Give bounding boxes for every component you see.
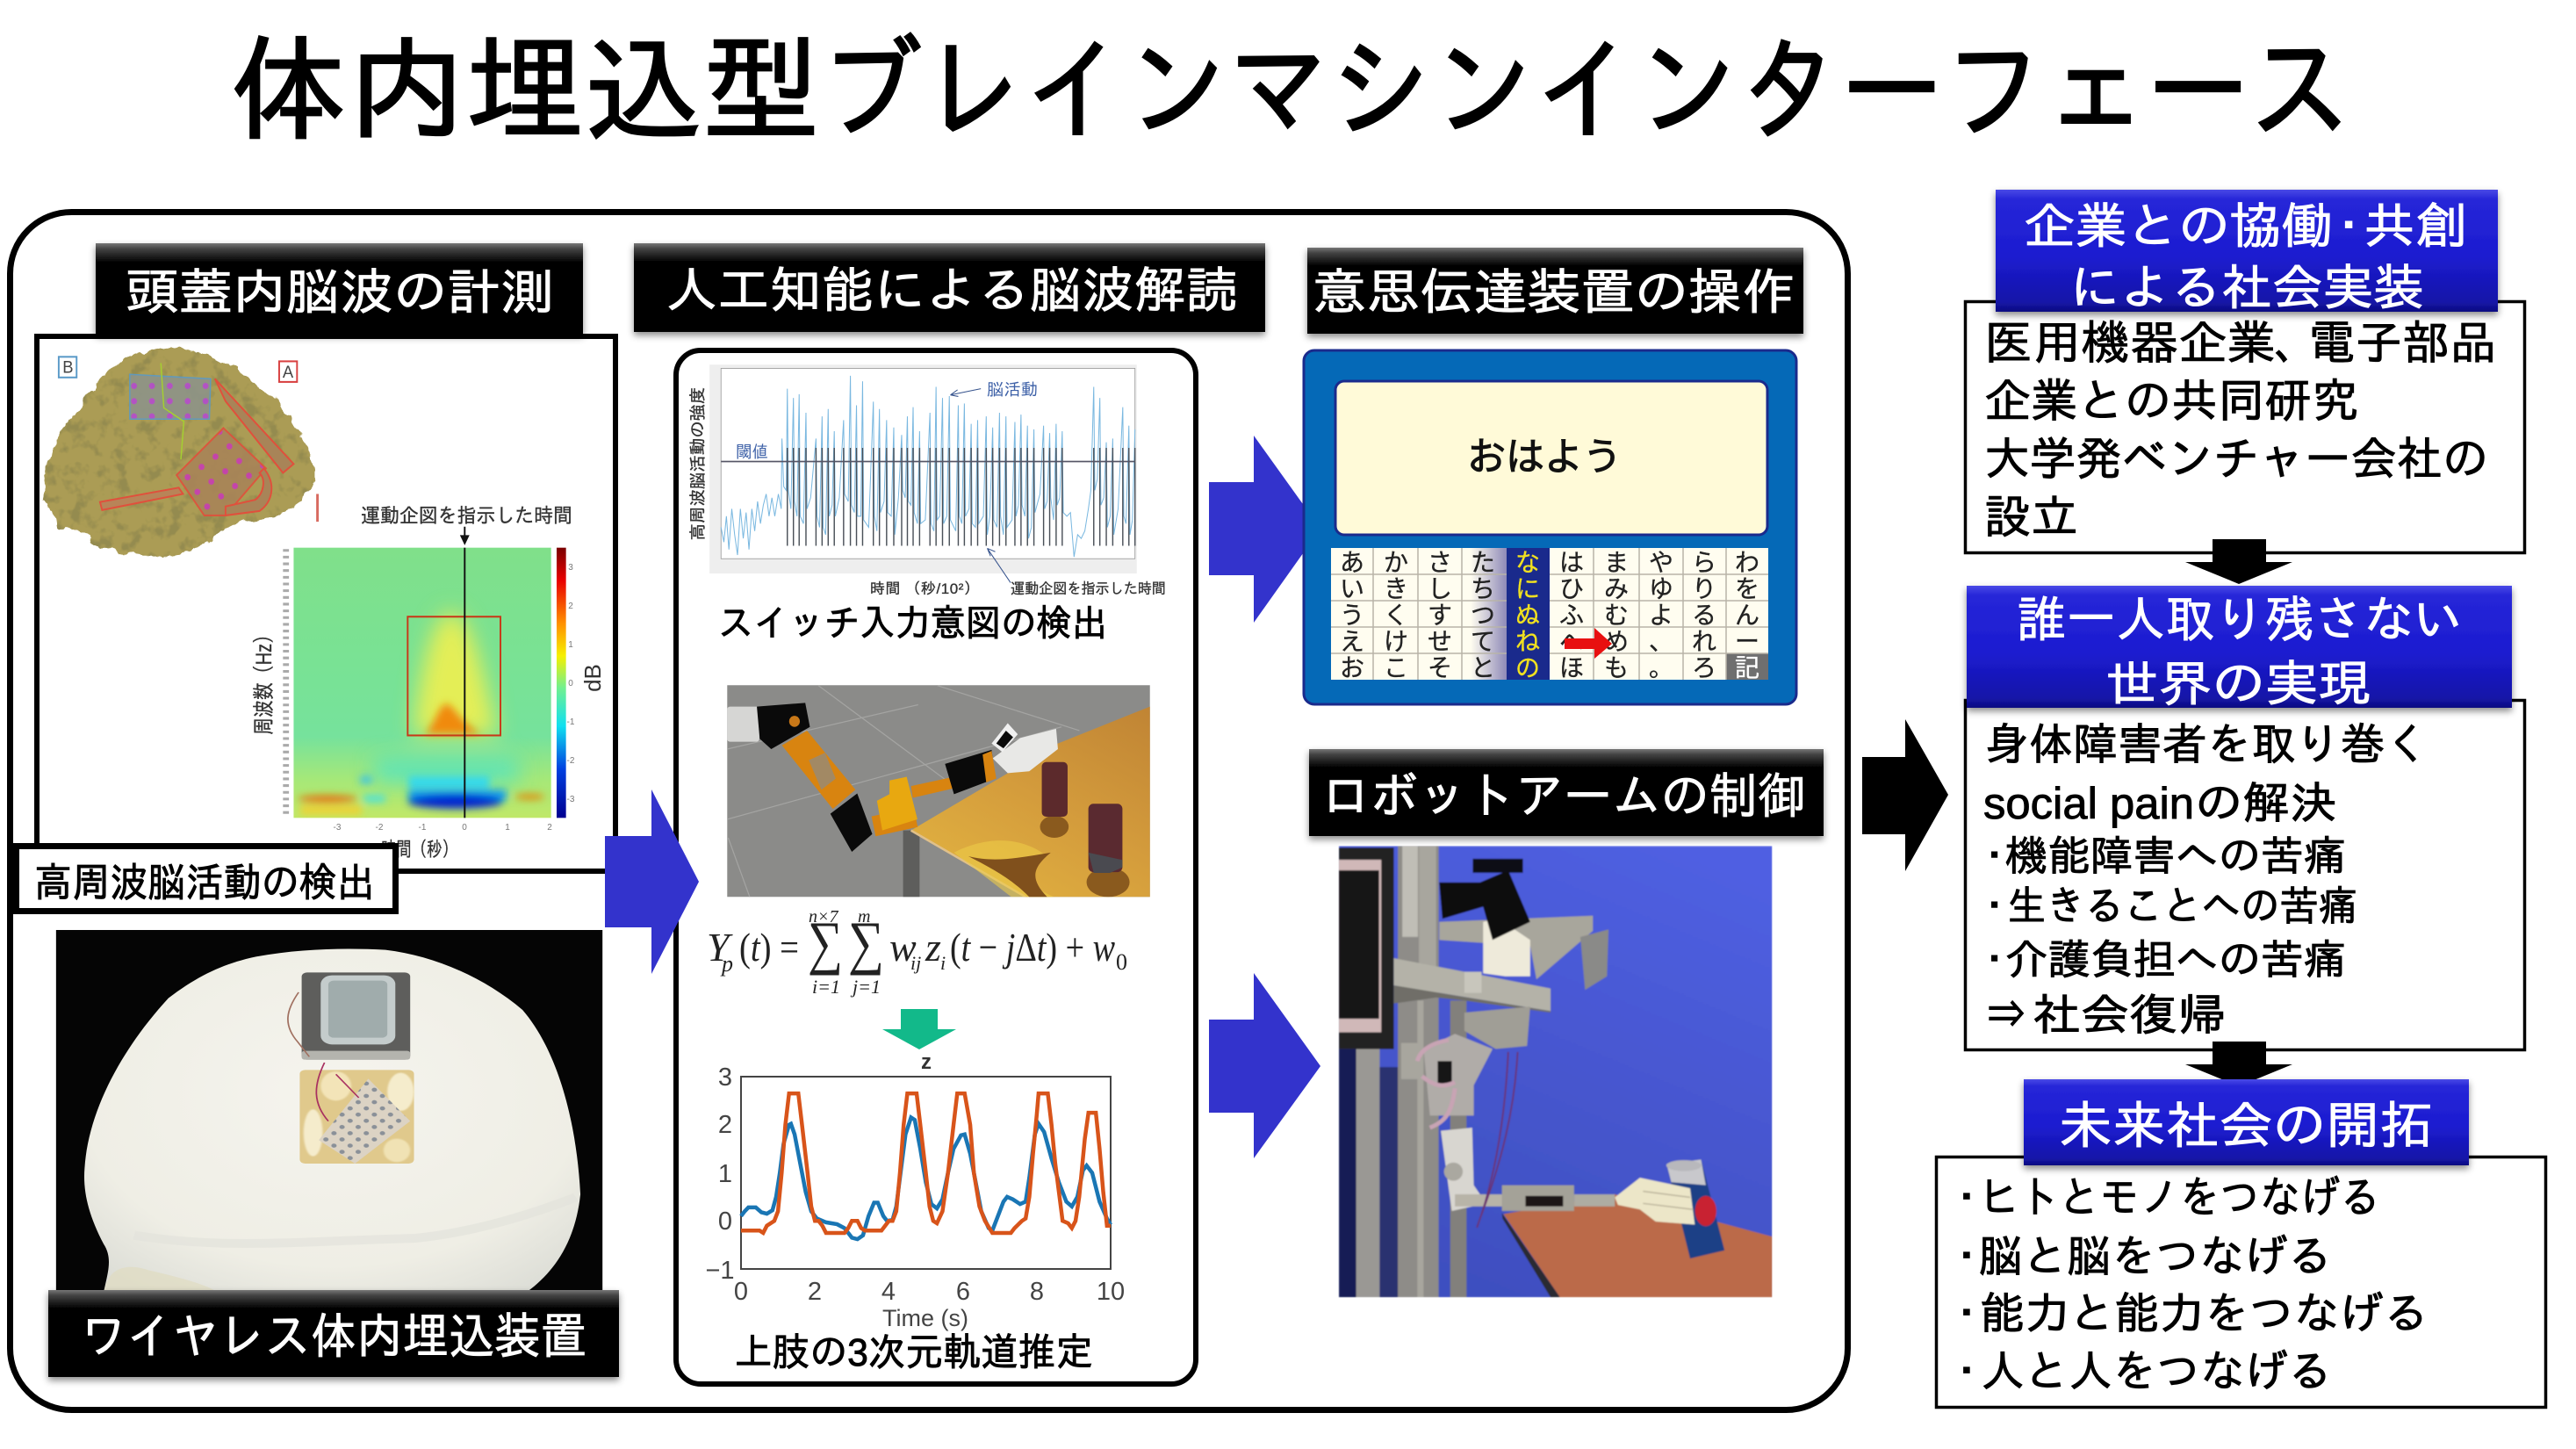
chart: 3D trajectory z axis: 2	[808, 1278, 822, 1306]
speller character grid: わ	[1735, 549, 1759, 576]
equation: trajectory decoder: j=1	[850, 976, 881, 998]
title: ブレインマシンインターフェース	[820, 26, 2351, 155]
speller character grid: く	[1384, 602, 1408, 629]
equation: trajectory decoder: Y	[707, 925, 733, 970]
heading: inclusive society: 世界の実現	[2105, 656, 2371, 711]
chart: 3D trajectory z axis: 0	[718, 1208, 732, 1236]
panel: future society body: 能力と能力をつなげる	[1980, 1289, 2428, 1338]
title	[230, 26, 2351, 155]
chart y label: 高周波脳活動の強度	[689, 386, 708, 541]
speller character grid: よ	[1649, 602, 1673, 629]
figure: brain with electrodes: B	[62, 358, 74, 378]
speller character grid: あ	[1340, 549, 1364, 576]
speller character grid: ん	[1735, 602, 1759, 629]
chart: 3D trajectory z axis: 2	[718, 1111, 732, 1139]
panel: future society body: ヒトとモノをつなげる	[1979, 1173, 2380, 1222]
caption: high-frequency activity detection	[16, 847, 395, 912]
speller character grid: め	[1604, 628, 1629, 655]
panel: future society body: ・	[1945, 1289, 1989, 1338]
panel: inclusive society body: の解決	[2195, 779, 2337, 828]
cue label: 運動企図を指示した時間	[1011, 580, 1166, 597]
equation: trajectory decoder: ij	[910, 952, 921, 974]
speller character grid: ー	[1735, 628, 1759, 655]
panel: industry collaboration body	[1965, 302, 2525, 553]
figure: brain with electrodes: A	[283, 363, 294, 382]
equation: trajectory decoder: z	[925, 925, 941, 970]
heading: industry collaboration	[1996, 190, 2498, 315]
heading: future society: 未来社会の開拓	[2059, 1098, 2433, 1155]
speller character grid: む	[1604, 602, 1629, 629]
heatmap tick labels: 2	[568, 602, 573, 611]
equation: trajectory decoder: n×7	[809, 907, 838, 926]
speller character grid: へ	[1559, 628, 1584, 655]
arrow: black right to outcomes	[1862, 719, 1948, 871]
chart: 3D trajectory z axis: 3	[718, 1063, 732, 1092]
heatmap tick labels: -1	[419, 823, 427, 833]
panel: future society body: 脳と脳をつなげる	[1979, 1232, 2332, 1281]
heading: intracranial EEG	[96, 243, 583, 334]
panel: industry collaboration body: 設立	[1984, 492, 2078, 544]
heatmap tick labels: 3	[568, 563, 573, 573]
panel: intracranial EEG measurement	[37, 336, 615, 871]
heatmap tick labels: 0	[568, 679, 573, 688]
speller character grid: ゆ	[1649, 575, 1673, 602]
speller character grid: て	[1471, 628, 1495, 655]
panel: future society body: 人と人をつなげる	[1981, 1347, 2332, 1396]
brain activity label: 脳活動	[987, 381, 1038, 400]
heatmap tick labels: -1	[567, 717, 575, 727]
chart: switch detection waveform	[709, 364, 1137, 583]
heading: AI decoding: 人工知能による脳波解読	[666, 263, 1238, 318]
panel: industry collaboration body: 企業との共同研究	[1984, 376, 2358, 428]
arrow: black down 1	[2185, 539, 2292, 584]
speller character grid: こ	[1384, 654, 1408, 681]
speller character grid: し	[1428, 575, 1452, 602]
speller character grid: せ	[1428, 628, 1452, 655]
panel: inclusive society body: ・	[1974, 833, 2015, 879]
speller character grid: ち	[1471, 575, 1495, 602]
figure: brain with electrodes	[44, 350, 319, 556]
panel: speller screen	[1304, 350, 1796, 704]
speller character grid: り	[1692, 575, 1716, 602]
speller character grid: 。	[1649, 654, 1673, 681]
speller character grid: い	[1340, 575, 1364, 602]
panel: inclusive society body: ・	[1974, 936, 2015, 983]
speller character grid: つ	[1471, 602, 1495, 629]
heatmap tick labels: 1	[568, 640, 573, 650]
speller character grid: お	[1340, 654, 1364, 681]
heatmap tick labels: 2	[547, 823, 552, 833]
speller character grid: ぬ	[1515, 602, 1540, 629]
equation: trajectory decoder: ∑	[848, 909, 884, 976]
speller character grid: ね	[1515, 628, 1540, 655]
speller character grid: 記	[1735, 654, 1759, 681]
panel: industry collaboration body: 医用機器企業	[1984, 318, 2276, 370]
panel: inclusive society body	[1965, 701, 2525, 1050]
speller character grid: は	[1559, 549, 1584, 576]
equation: trajectory decoder: p	[720, 951, 733, 977]
heading: wireless implant	[48, 1290, 619, 1377]
threshold label: 閾値	[736, 443, 768, 462]
speller character grid: け	[1384, 628, 1408, 655]
heading: communication device	[1307, 248, 1803, 334]
speller character grid: す	[1428, 602, 1452, 629]
speller character grid: う	[1340, 602, 1364, 629]
heading: inclusive society: 誰一人取り残さない	[2017, 592, 2463, 647]
heatmap tick labels: -2	[567, 756, 575, 766]
heading: communication device: 意思伝達装置の操作	[1313, 264, 1795, 320]
speller character grid: れ	[1692, 628, 1716, 655]
arrow: black down 2	[2185, 1042, 2292, 1086]
heatmap tick labels: 0	[462, 823, 467, 833]
equation: trajectory decoder: (t) =	[739, 925, 799, 970]
speller character grid: ま	[1604, 549, 1629, 576]
chart x label: 時間 （秒/10²）	[870, 580, 979, 597]
speller output display	[1335, 381, 1767, 535]
speller character grid	[1331, 548, 1768, 681]
speller character grid: る	[1692, 602, 1716, 629]
speller output display: おはよう	[1467, 436, 1622, 479]
chart: time-frequency heatmap	[286, 527, 566, 818]
speller character grid: と	[1471, 654, 1495, 681]
heading: wireless implant: ワイヤレス体内埋込装置	[81, 1308, 586, 1364]
caption: high-frequency activity detection: 高周波脳活動の検出	[34, 860, 375, 905]
panel: AI decoding	[676, 350, 1196, 1384]
panel: inclusive society body: 介護負担への苦痛	[2005, 936, 2346, 983]
image: simulated robot arm	[727, 685, 1150, 897]
panel: inclusive society body: 身体障害者を取り巻く	[1984, 720, 2429, 769]
equation: trajectory decoder: m	[858, 907, 870, 926]
chart: 3D trajectory z axis: 10	[1097, 1278, 1125, 1306]
photo: wireless implant on skull	[56, 930, 602, 1293]
photo: robot arm grasping can	[1339, 846, 1773, 1297]
speller character grid: そ	[1428, 654, 1452, 681]
equation: trajectory decoder: (t − jΔt) + w	[950, 925, 1115, 970]
chart: 3D trajectory z axis: 1	[718, 1160, 732, 1188]
speller character grid: か	[1384, 549, 1408, 576]
arrow: green down	[882, 1009, 956, 1049]
heading: intracranial EEG: 頭蓋内脳波の計測	[126, 264, 554, 320]
heading: inclusive society	[1967, 586, 2512, 711]
speller character grid: ろ	[1692, 654, 1716, 681]
speller character grid: や	[1649, 549, 1673, 576]
panel: future society body: ・	[1945, 1232, 1989, 1281]
equation: trajectory decoder: ∑	[808, 909, 843, 976]
chart: 3D trajectory z axis: 4	[881, 1278, 896, 1306]
arrow: blue to robot	[1209, 973, 1320, 1158]
heading: industry collaboration: 企業との協働	[2024, 198, 2333, 254]
speller character grid: ひ	[1559, 575, 1584, 602]
panel: future society body	[1937, 1157, 2546, 1407]
speller character grid: ふ	[1559, 602, 1584, 629]
panel: industry collaboration body: 、	[2274, 318, 2321, 370]
speller character grid: き	[1384, 575, 1408, 602]
heading: industry collaboration: 共創	[2364, 198, 2467, 254]
heatmap y label: 周波数（Hz）	[252, 626, 277, 735]
chart: 3D trajectory z axis: z	[921, 1050, 932, 1074]
equation: trajectory decoder: i=1	[812, 976, 840, 998]
panel: main research flow	[11, 213, 1847, 1410]
caption: upper limb trajectory: 上肢の3次元軌道推定	[735, 1331, 1093, 1374]
speller character grid: な	[1515, 549, 1540, 576]
speller character grid: ら	[1692, 549, 1716, 576]
panel: inclusive society body: 生きることへの苦痛	[2007, 883, 2357, 929]
heading: robot arm control	[1309, 749, 1824, 836]
equation: trajectory decoder: w	[889, 925, 917, 970]
panel: future society body: ・	[1945, 1173, 1989, 1222]
speller character grid: も	[1604, 654, 1629, 681]
speller character grid: に	[1515, 575, 1540, 602]
title: 体内埋込型	[230, 26, 820, 155]
arrow: blue to decoding	[605, 789, 699, 974]
panel: industry collaboration body: 電子部品	[2308, 318, 2497, 370]
caption: switch intent detection: スイッチ入力意図の検出	[718, 602, 1107, 644]
chart: 3D trajectory z axis: −1	[705, 1257, 735, 1285]
speller character grid: え	[1340, 628, 1364, 655]
speller character grid: た	[1471, 549, 1495, 576]
heading: AI decoding	[634, 243, 1265, 332]
heatmap tick labels	[334, 563, 575, 833]
chart: 3D trajectory z axis	[705, 1050, 1125, 1331]
heatmap tick labels: -3	[334, 823, 342, 833]
heatmap tick labels: -3	[567, 795, 575, 804]
equation: trajectory decoder: i	[940, 952, 946, 974]
speller character grid: の	[1515, 654, 1540, 681]
chart: 3D trajectory z axis: 8	[1030, 1278, 1044, 1306]
panel: future society body: ・	[1945, 1347, 1989, 1396]
heading: industry collaboration: による社会実装	[2069, 260, 2424, 315]
equation: trajectory decoder	[707, 907, 1127, 998]
speller character grid: み	[1604, 575, 1629, 602]
chart: 3D trajectory z axis: Time (s)	[882, 1305, 968, 1331]
chart: 3D trajectory z axis: 6	[956, 1278, 970, 1306]
speller red pointer arrow	[1565, 628, 1612, 659]
heading: future society	[2024, 1079, 2469, 1165]
heatmap tick labels: -2	[376, 823, 384, 833]
speller character grid: ほ	[1559, 654, 1584, 681]
panel: inclusive society body: ⇒	[1987, 991, 2026, 1040]
heatmap x label: 時間（秒）	[381, 838, 457, 861]
speller character grid: を	[1735, 575, 1759, 602]
panel: inclusive society body: social pain	[1983, 779, 2194, 828]
arrow: blue to speller	[1209, 436, 1320, 623]
panel: industry collaboration body: 大学発ベンチャー会社の	[1984, 434, 2488, 486]
speller character grid: 、	[1649, 628, 1673, 655]
heatmap tick labels: 1	[505, 823, 510, 833]
heatmap colorbar label: dB	[579, 664, 606, 692]
heatmap annotation: cue time: 運動企図を指示した時間	[361, 504, 572, 527]
panel: inclusive society body: ・	[1974, 883, 2015, 929]
panel: inclusive society body: 機能障害への苦痛	[2005, 833, 2346, 879]
heading: industry collaboration: ・	[2324, 198, 2373, 254]
speller character grid: さ	[1428, 549, 1452, 576]
panel: inclusive society body: 社会復帰	[2033, 991, 2226, 1040]
chart: 3D trajectory z axis: 0	[734, 1278, 748, 1306]
heading: robot arm control: ロボットアームの制御	[1321, 768, 1806, 824]
equation: trajectory decoder: 0	[1116, 949, 1127, 975]
